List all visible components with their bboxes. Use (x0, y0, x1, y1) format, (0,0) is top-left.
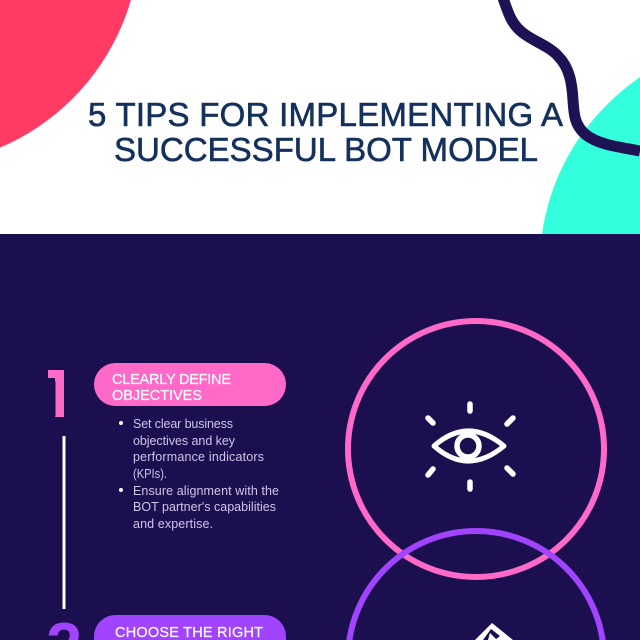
tip 1 bullet list: (KPIs). (133, 467, 167, 481)
tip 1 bullet list: objectives and key (133, 434, 236, 448)
tip 2 heading pill (94, 615, 286, 640)
vertical connector (62, 436, 66, 609)
icon: eye (428, 404, 513, 489)
tip 1 heading pill: CLEARLY DEFINE (112, 372, 231, 388)
red circle decoration (0, 0, 140, 166)
title (88, 96, 563, 168)
tip 1 bullet list: and expertise. (133, 517, 213, 531)
number 1 (48, 370, 64, 417)
title: SUCCESSFUL BOT MODEL (114, 131, 538, 168)
tip 1 heading pill (94, 363, 286, 406)
title: 5 TIPS FOR IMPLEMENTING A (88, 96, 563, 133)
pink circle (348, 321, 604, 577)
dark content panel (0, 234, 640, 640)
tip 1 bullet list (119, 417, 279, 531)
icon: tip 2 partial (475, 623, 513, 640)
purple circle (348, 531, 604, 640)
tip 1 heading pill: OBJECTIVES (112, 388, 202, 404)
number 1: 1 (38, 356, 80, 440)
teal circle decoration (542, 77, 640, 234)
tip 1 bullet list: performance indicators (133, 450, 264, 464)
header panel (0, 0, 640, 234)
tip 1 bullet list: BOT partner's capabilities (133, 500, 276, 514)
tip 1 bullet list: Set clear business (133, 417, 233, 431)
tip 1 bullet list: Ensure alignment with the (133, 484, 279, 498)
navy wavy line (503, 0, 640, 151)
